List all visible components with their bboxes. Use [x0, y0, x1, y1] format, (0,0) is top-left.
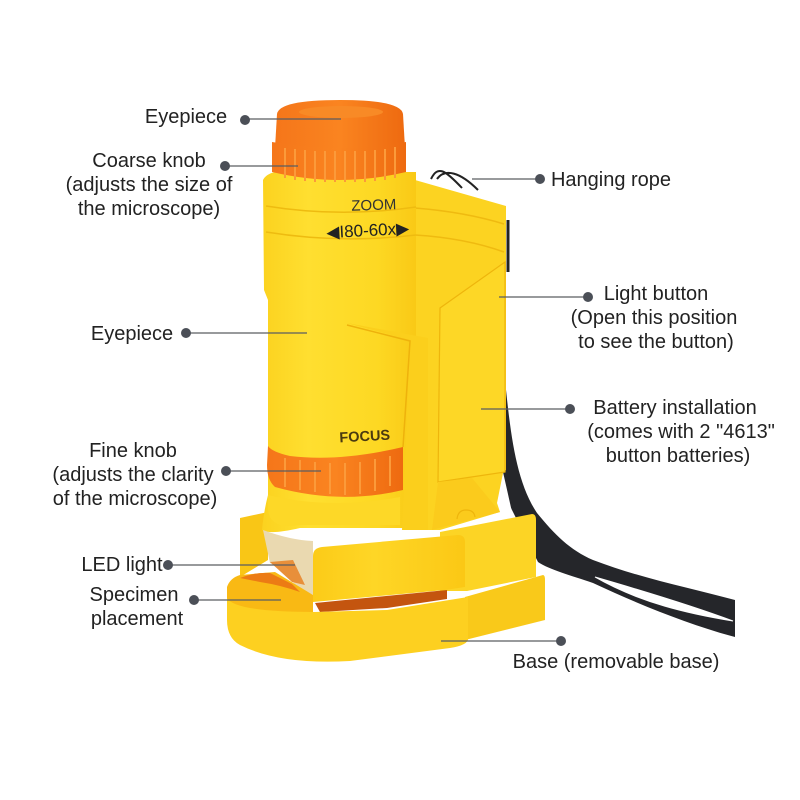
callout: specimen [189, 595, 281, 605]
microscope [227, 100, 545, 662]
label: battery: (comes with 2 "4613" [587, 421, 775, 443]
label: battery: button batteries) [606, 445, 750, 467]
label: base: Base (removable base) [513, 651, 719, 673]
label: coarse knob: (adjusts the size of [66, 174, 233, 196]
lower barrel highlight [268, 495, 400, 526]
focus window frame [347, 323, 428, 530]
label: specimen placement: placement [91, 608, 184, 630]
label: coarse knob: the microscope) [78, 198, 220, 220]
label: fine knob: (adjusts the clarity [52, 464, 214, 486]
fine knob [267, 446, 403, 497]
label: light button: to see the button) [578, 331, 734, 353]
label: fine knob: of the microscope) [53, 488, 217, 510]
main barrel [262, 172, 416, 532]
callout: light button [499, 292, 593, 302]
label: light button: (Open this position [571, 307, 737, 329]
callout: eyepiece body [181, 328, 307, 338]
eyepiece cap [275, 100, 405, 148]
lens [263, 530, 313, 595]
text: zoom: ZOOM [351, 196, 397, 215]
label: coarse knob: Coarse knob [92, 150, 206, 172]
specimen platform [227, 572, 313, 620]
rope loop [431, 171, 478, 190]
callout: hanging rope [472, 174, 545, 184]
base slot [315, 590, 447, 612]
callout: eyepiece top [240, 115, 341, 125]
callout: battery [481, 404, 575, 414]
back post [240, 512, 268, 577]
label: coarse knob [66, 150, 233, 220]
callout: LED light [163, 560, 295, 570]
base right block [440, 514, 536, 591]
battery cover panel [438, 262, 505, 482]
text: magnification: ◀I80-60x▶ [326, 219, 411, 242]
strap clip [506, 220, 510, 272]
label: specimen placement [90, 584, 184, 630]
strut and hinge [432, 478, 500, 530]
label: eyepiece body: Eyepiece [91, 323, 173, 345]
label: battery [587, 397, 775, 467]
callout lines [163, 115, 593, 646]
base lower step [465, 575, 545, 640]
label: specimen placement: Specimen [90, 584, 178, 606]
label: battery: Battery installation [593, 397, 757, 419]
text: focus: FOCUS [339, 428, 391, 446]
label: light button [571, 283, 737, 353]
label: LED light: LED light [81, 554, 163, 576]
label: hanging rope: Hanging rope [551, 169, 671, 191]
label: fine knob: Fine knob [89, 440, 177, 462]
callout: coarse knob [220, 161, 298, 171]
label: light button: Light button [604, 283, 708, 305]
label: eyepiece: Eyepiece [145, 106, 227, 128]
callout: base [441, 636, 566, 646]
upper base block [313, 535, 465, 602]
icon: wrist strap [431, 171, 735, 637]
label: fine knob [52, 440, 217, 510]
coarse knob [272, 142, 406, 180]
base front [227, 597, 468, 662]
callout: fine knob [221, 466, 321, 476]
right housing [415, 180, 506, 530]
